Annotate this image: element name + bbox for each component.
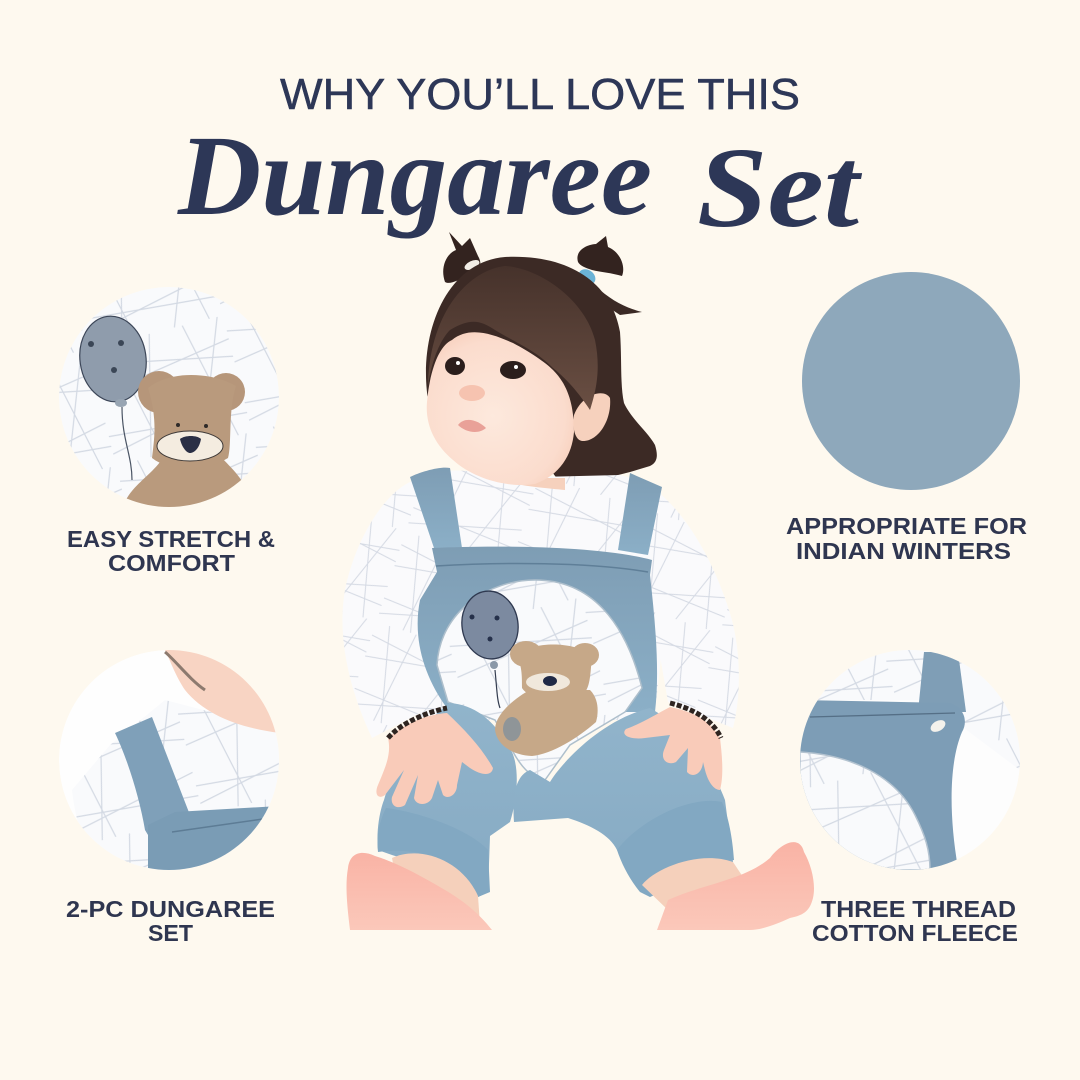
bib xyxy=(418,547,657,712)
title: why you'll love this: WHY YOU’LL LOVE THIS xyxy=(280,70,800,119)
right hand xyxy=(624,707,722,790)
right foot xyxy=(657,842,814,930)
label: INDIAN WINTERS xyxy=(796,538,1011,564)
applique: teddy bear xyxy=(495,641,599,756)
label xyxy=(786,513,1027,564)
neck xyxy=(495,478,565,490)
photo circle: shoulder strap close-up xyxy=(59,650,280,880)
face xyxy=(427,332,574,485)
eyes, nose and mouth xyxy=(445,357,526,432)
panel: 2-pc dungaree set xyxy=(59,650,280,946)
hair back and pigtails xyxy=(426,232,657,484)
label: EASY STRETCH & xyxy=(67,526,275,552)
left bracelets xyxy=(388,708,447,738)
label xyxy=(812,896,1018,946)
right bracelets xyxy=(670,703,721,738)
left foot xyxy=(347,853,492,930)
right strap xyxy=(618,473,662,555)
label: APPROPRIATE FOR xyxy=(786,513,1027,539)
left cuff xyxy=(377,808,490,897)
label: SET xyxy=(148,920,193,946)
title: dungaree set xyxy=(177,112,863,251)
white applique panel xyxy=(437,580,642,780)
photo circle: fleece swatch xyxy=(802,272,1020,490)
panel: appropriate for indian winters xyxy=(786,272,1027,564)
panel: three thread cotton fleece xyxy=(800,650,1020,946)
photo circle: bear and balloon embroidery xyxy=(59,287,279,512)
panel: easy stretch and comfort xyxy=(59,287,279,576)
title: dungaree set: Set xyxy=(697,124,863,251)
label xyxy=(66,896,275,946)
baby figure xyxy=(342,232,814,930)
torso: white printed top xyxy=(415,470,672,720)
right cuff xyxy=(617,801,734,897)
left leg xyxy=(377,703,517,897)
ear xyxy=(573,393,610,441)
right leg xyxy=(514,708,733,897)
left sleeve xyxy=(342,480,445,738)
left hand xyxy=(376,713,493,807)
label: COMFORT xyxy=(108,550,235,576)
right shin xyxy=(642,858,745,910)
left shin xyxy=(392,853,480,925)
bangs xyxy=(428,266,598,410)
right sleeve xyxy=(640,480,739,728)
label: 2-PC DUNGAREE xyxy=(66,896,275,922)
label xyxy=(67,526,275,576)
left strap xyxy=(410,468,462,548)
photo circle: bib close-up xyxy=(800,650,1020,870)
label: COTTON FLEECE xyxy=(812,920,1018,946)
applique: balloon xyxy=(458,587,522,708)
label: THREE THREAD xyxy=(821,896,1016,922)
title: dungaree set: Dungaree xyxy=(177,112,652,239)
